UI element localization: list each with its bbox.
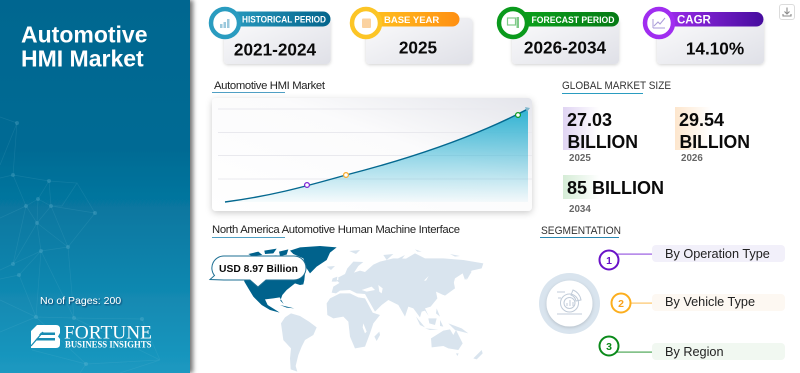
market size: 2026: 29.54 xyxy=(679,110,724,130)
market size: 2026: 2026 xyxy=(681,153,703,164)
stat card: base year: 2025 xyxy=(399,38,438,58)
network pattern xyxy=(0,117,160,373)
stat card: base year: BASE YEAR xyxy=(384,15,439,26)
segment 3: by region xyxy=(600,336,785,360)
title: HMI Market xyxy=(21,46,144,72)
title xyxy=(21,22,148,72)
page count: No of Pages: 200 xyxy=(40,295,121,307)
stat card: base year xyxy=(352,9,472,64)
market size: 2025: BILLION xyxy=(568,132,638,152)
logo: Fortune Business Insights: BUSINESS INSIGHTS xyxy=(65,340,152,350)
icon: segmentation dial xyxy=(539,273,600,334)
market size: 2026: BILLION xyxy=(680,132,750,152)
market size: 2025 xyxy=(563,107,638,164)
callout: USD 8.97 Billion xyxy=(210,256,306,287)
segment 3: by region: By Region xyxy=(665,345,724,359)
market size: 2034 xyxy=(563,175,664,215)
stat card: CAGR: 14.10% xyxy=(686,38,744,58)
stat card: forecast period: FORECAST PERIOD xyxy=(532,15,615,25)
segment 2: by vehicle type: 2 xyxy=(618,298,624,310)
stat card: historical period xyxy=(211,9,330,64)
stat card: forecast period: 2026-2034 xyxy=(524,38,607,58)
segment 1: by operation type: By Operation Type xyxy=(665,247,770,261)
chart: market growth curve xyxy=(212,98,532,211)
market size: 2025: 2025 xyxy=(569,153,591,164)
logo: Fortune Business Insights: FORTUNE xyxy=(64,322,152,344)
segment 3: by region: 3 xyxy=(606,341,612,353)
callout: USD 8.97 Billion: USD 8.97 Billion xyxy=(219,264,298,275)
stat card: historical period: 2021-2024 xyxy=(234,40,317,60)
market size: 2025: 27.03 xyxy=(567,110,612,130)
heading: global market size: GLOBAL MARKET SIZE xyxy=(562,80,671,92)
segment 2: by vehicle type: By Vehicle Type xyxy=(665,295,755,309)
heading: chart: Automotive HMI Market xyxy=(214,80,326,92)
market size: 2034: 85 BILLION xyxy=(567,178,664,198)
stat card: forecast period xyxy=(499,9,619,64)
panel: sidebar xyxy=(0,0,190,373)
stat card: CAGR xyxy=(645,9,764,64)
segment 1: by operation type: 1 xyxy=(606,255,612,267)
logo: Fortune Business Insights xyxy=(31,322,152,350)
market size: 2034: 2034 xyxy=(569,204,591,215)
stat card: CAGR: CAGR xyxy=(677,14,712,26)
heading: segmentation: SEGMENTATION xyxy=(541,225,621,237)
world map xyxy=(243,246,483,372)
market size: 2026 xyxy=(675,107,750,164)
stat card: historical period: HISTORICAL PERIOD xyxy=(242,14,326,24)
title: Automotive xyxy=(21,22,148,48)
segment 1: by operation type xyxy=(600,245,785,270)
heading: regional: North America Automotive Human Machine Interface xyxy=(212,224,460,236)
icon: download xyxy=(780,4,794,20)
segment 2: by vehicle type xyxy=(612,294,785,312)
